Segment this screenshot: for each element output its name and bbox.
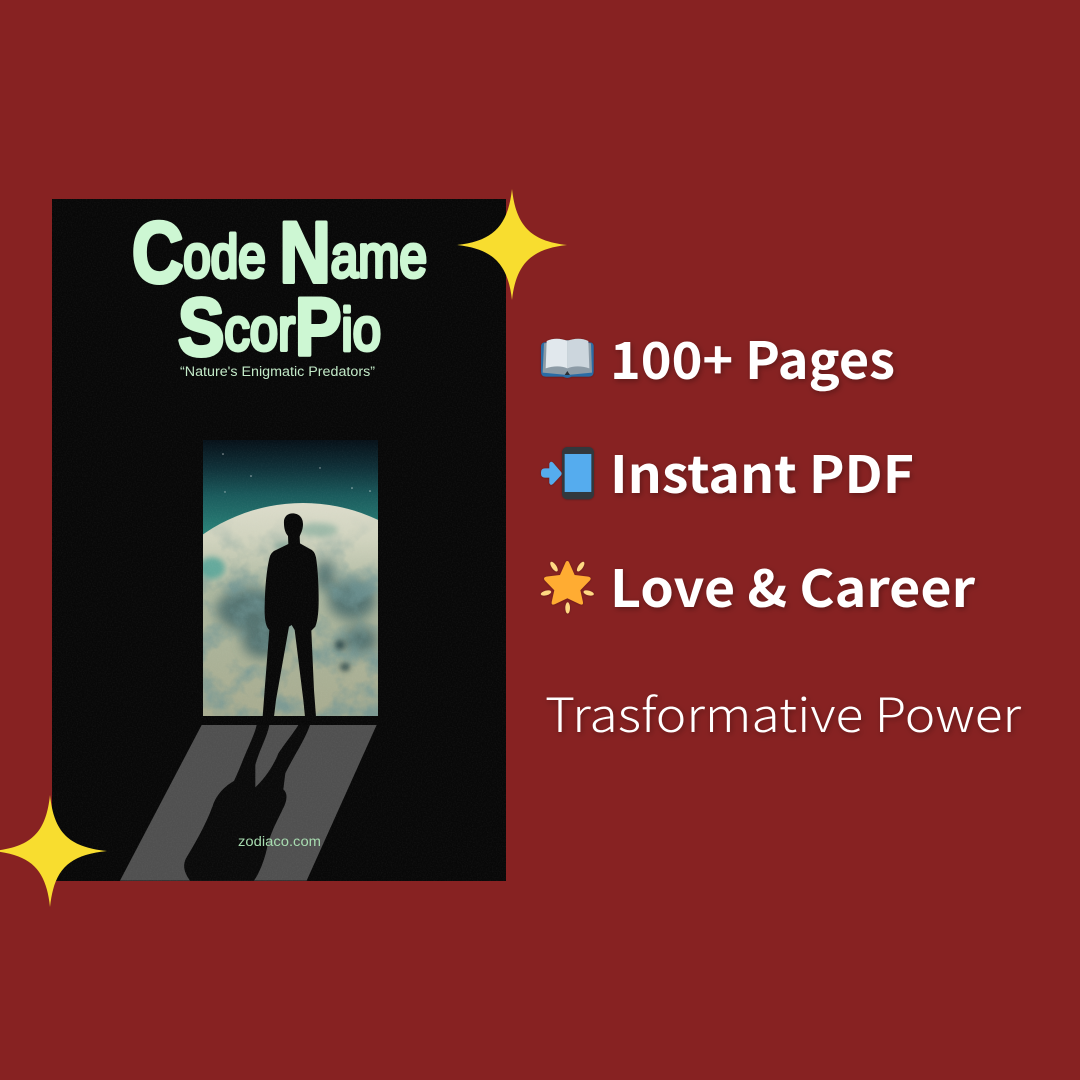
sparkle: top right of cover: [457, 189, 567, 300]
floor light patch with shadow: [120, 725, 377, 881]
cover title: Code Name Scorpio: io: [341, 296, 381, 363]
cover title: Code Name Scorpio: ode: [183, 223, 280, 290]
feature: Trasformative Power: Trasformative Power: [545, 677, 1021, 746]
cover title: Code Name Scorpio: C: [132, 205, 183, 301]
cover website: zodiaco.com: [238, 834, 321, 849]
cover title: Code Name Scorpio: [132, 205, 427, 373]
feature: Instant PDF: Instant PDF: [610, 434, 914, 508]
cover title: Code Name Scorpio: N: [280, 205, 331, 301]
sparkle: bottom left of cover: [0, 795, 107, 907]
feature: 100+ Pages: 100+ Pages: [610, 320, 895, 394]
cover title: Code Name Scorpio: cor: [224, 296, 295, 363]
icon: mobile with arrow: [541, 447, 594, 499]
cover title: Code Name Scorpio: S: [178, 282, 224, 373]
panel: book cover: [52, 199, 506, 881]
feature: Love & Career: Love & Career: [610, 548, 976, 622]
cover texture: [52, 199, 506, 881]
silhouette figure: [263, 513, 319, 717]
cover title: Code Name Scorpio: P: [295, 282, 341, 373]
cover title: Code Name Scorpio: ame: [331, 223, 427, 290]
moon window illustration: [203, 440, 378, 716]
icon: glowing star: [540, 561, 594, 614]
icon: open book: [541, 339, 594, 378]
cover subtitle: “Nature's Enigmatic Predators”: [180, 364, 375, 379]
